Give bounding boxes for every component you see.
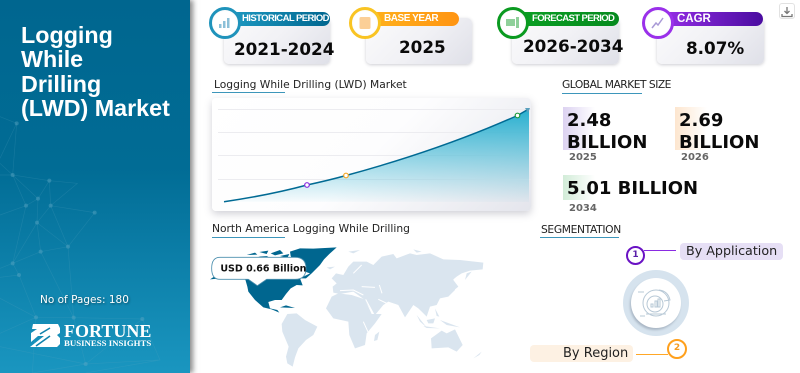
heading: segmentation: SEGMENTATION	[541, 223, 621, 236]
label	[530, 345, 633, 362]
South America	[282, 313, 317, 367]
Eastern hemisphere landmasses	[326, 249, 483, 358]
badge header: FORECAST PERIOD	[532, 13, 614, 24]
value: 8.07%	[686, 38, 744, 58]
report title: (LWD) Market	[21, 95, 170, 121]
logo	[30, 321, 151, 348]
sidebar panel	[0, 0, 190, 373]
metric: 2026: 2026	[681, 152, 709, 163]
metric: 2034: 2034	[569, 203, 597, 214]
Eurasia	[332, 253, 483, 317]
label: By Region	[563, 346, 628, 361]
segment hub	[623, 270, 689, 336]
page count: No of Pages: 180	[40, 294, 129, 306]
connector	[636, 354, 668, 355]
badge header: BASE YEAR	[384, 13, 438, 24]
metric: 2026: BILLION	[679, 132, 759, 153]
metric: 2025: 2.48	[567, 110, 611, 131]
value callout: USD 0.66 Billion	[220, 263, 307, 274]
label: By Application	[686, 243, 777, 258]
metric: 2026	[675, 107, 759, 163]
heading: North America: North America Logging While Drilling	[212, 222, 410, 235]
number marker: 1	[632, 250, 639, 260]
icon: download button	[779, 3, 795, 19]
metric: 2025	[563, 107, 647, 163]
islands	[327, 249, 482, 358]
segment: by region	[530, 339, 687, 362]
number marker	[626, 246, 645, 265]
badge header	[512, 12, 619, 26]
connector	[644, 250, 676, 251]
metric: 2025: 2025	[569, 152, 597, 163]
report title: While	[21, 46, 83, 72]
growth line	[224, 110, 527, 202]
Africa	[326, 293, 382, 348]
marker 2026	[344, 173, 348, 178]
icon: bar chart	[209, 7, 241, 39]
heading: market chart: Logging While Drilling (LWD) Market	[214, 78, 407, 91]
inland seas	[340, 265, 387, 333]
badge header	[657, 12, 763, 26]
icon: forecast monitor	[497, 7, 529, 39]
value: 2026-2034	[523, 36, 623, 56]
stat card: historical period	[209, 7, 334, 66]
badge header: HISTORICAL PERIOD	[242, 13, 329, 24]
logo wordmark: FORTUNE	[64, 321, 151, 341]
metric: 2026: 2.69	[679, 110, 723, 131]
marker 2034	[515, 113, 520, 118]
marker 2025	[305, 183, 309, 187]
logo tagline: BUSINESS INSIGHTS	[64, 338, 151, 348]
metric: 2025: BILLION	[567, 132, 647, 153]
number marker: 2	[674, 343, 680, 353]
metric: 2034	[563, 175, 698, 214]
North America highlighted region	[210, 247, 337, 313]
value callout	[212, 257, 307, 286]
report title	[21, 22, 170, 121]
stat card: base year	[349, 7, 474, 66]
logo mark	[30, 324, 60, 347]
network pattern	[0, 116, 160, 373]
growth area	[224, 109, 529, 202]
icon: growth chart	[642, 7, 674, 39]
segment: by application	[626, 243, 783, 265]
Australia	[431, 329, 463, 352]
badge header: CAGR	[677, 13, 711, 25]
value: 2021-2024	[234, 39, 334, 59]
heading: global market size: GLOBAL MARKET SIZE	[562, 78, 671, 91]
stat card: forecast period	[497, 7, 623, 66]
value: 2025	[399, 37, 446, 57]
badge header	[224, 12, 330, 26]
icon: calendar	[349, 7, 381, 39]
stat card: CAGR	[642, 7, 766, 66]
area chart panel	[212, 98, 531, 211]
report title: Logging	[21, 22, 113, 48]
icon: pie analytics	[638, 290, 670, 316]
arrow tip	[525, 108, 530, 113]
metric: 2034: 5.01 BILLION	[567, 178, 698, 199]
badge header	[366, 12, 459, 26]
number marker	[667, 339, 687, 359]
world map	[210, 247, 484, 366]
report title: Drilling	[21, 71, 101, 97]
